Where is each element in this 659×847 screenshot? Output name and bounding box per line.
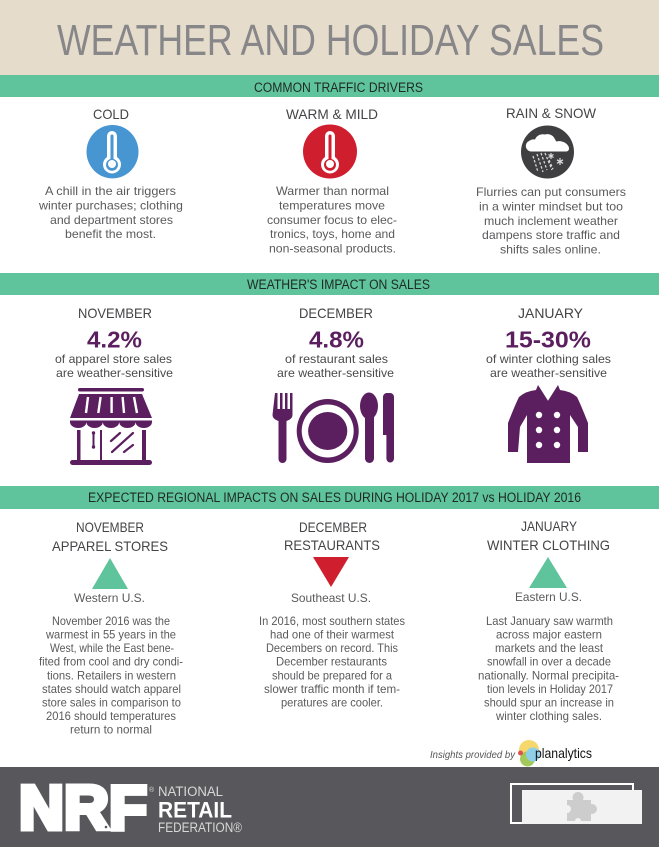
text: warm description: Warmer than normal bbox=[276, 184, 389, 198]
text: november explanation: return to normal bbox=[70, 723, 152, 737]
icon: storefront bbox=[70, 388, 152, 465]
panel: january winter clothing: JANUARY bbox=[521, 518, 578, 534]
text: december explanation bbox=[259, 614, 405, 709]
label: eastern US: Eastern U.S. bbox=[515, 590, 582, 604]
statistic: 4.8%: 4.8% bbox=[309, 326, 364, 352]
logo: NRF: ® bbox=[149, 786, 155, 794]
text: rain description: shifts sales online. bbox=[500, 243, 601, 257]
section band: weather impact: WEATHER'S IMPACT ON SALES bbox=[247, 277, 430, 292]
text: november explanation: states should watch apparel bbox=[42, 682, 181, 696]
text: january explanation: should spur an increase in bbox=[484, 695, 614, 709]
logo: NRF: NRF bbox=[19, 774, 147, 843]
placeholder with puzzle icon bbox=[522, 790, 642, 824]
text: apparel sensitivity: are weather-sensitive bbox=[56, 366, 173, 380]
panel: november apparel stores: APPAREL STORES bbox=[52, 538, 168, 554]
panel: december impact: DECEMBER bbox=[299, 305, 373, 321]
text: january explanation: Last January saw warmth bbox=[486, 614, 613, 628]
statistic: 15-30%: 15-30% bbox=[505, 326, 591, 352]
credit: insights provided by planalytics: planalytics bbox=[535, 745, 592, 761]
text: restaurant sensitivity: are weather-sensitive bbox=[277, 366, 394, 380]
panel: december restaurants bbox=[259, 519, 405, 709]
panel: january winter clothing: WINTER CLOTHING bbox=[487, 537, 610, 553]
text: december explanation: December restaurants bbox=[276, 655, 387, 669]
panel: december restaurants: RESTAURANTS bbox=[284, 537, 380, 553]
icon: red down triangle bbox=[313, 557, 349, 587]
text: restaurant sensitivity: of restaurant sales bbox=[285, 352, 388, 366]
credit: insights provided by planalytics: Insights provided by bbox=[430, 749, 516, 761]
text: december explanation: peratures are cooler. bbox=[281, 695, 383, 709]
icon: winter coat bbox=[508, 385, 588, 463]
text: winter clothing sensitivity: of winter clothing sales bbox=[486, 352, 611, 366]
text: november explanation: fited from cool and dry condi- bbox=[39, 655, 183, 669]
section band: regional impacts bbox=[0, 486, 659, 509]
logo: NRF bbox=[19, 774, 242, 843]
logo: NRF: FEDERATION® bbox=[158, 820, 242, 835]
panel: january winter clothing bbox=[478, 518, 619, 723]
text: warm description: non-seasonal products. bbox=[269, 242, 396, 256]
text: restaurant sensitivity bbox=[277, 352, 394, 380]
text: apparel sensitivity: of apparel store sales bbox=[55, 352, 172, 366]
text: january explanation: snowfall in over a decade bbox=[487, 655, 611, 669]
text: january explanation: across major eastern bbox=[496, 628, 602, 642]
section band: common traffic drivers bbox=[0, 75, 659, 97]
text: november explanation bbox=[39, 614, 183, 737]
icon: planalytics logo blobs bbox=[518, 740, 540, 766]
icon: red thermometer bbox=[303, 124, 357, 178]
footer bbox=[0, 767, 659, 847]
text: november explanation: tions. Retailers in western bbox=[47, 668, 176, 682]
icon: blue thermometer bbox=[86, 125, 138, 178]
text: rain description: much inclement weather bbox=[484, 214, 618, 228]
text: november explanation: West, while the East bene- bbox=[50, 641, 174, 655]
text: january explanation: nationally. Normal precipita- bbox=[478, 668, 619, 682]
panel: november apparel stores bbox=[39, 519, 183, 737]
text: warm description bbox=[267, 184, 397, 256]
text: rain description bbox=[476, 185, 626, 257]
panel: january impact bbox=[486, 305, 611, 463]
text: warm description: consumer focus to elec- bbox=[267, 213, 397, 227]
section band: regional impacts: EXPECTED REGIONAL IMPACTS ON SALES DURING HOLIDAY 2017 vs HOLIDAY 2016 bbox=[88, 490, 581, 505]
statistic: 4.2%: 4.2% bbox=[87, 326, 142, 352]
text: december explanation: In 2016, most southern states bbox=[259, 614, 405, 628]
panel: cold bbox=[38, 106, 183, 241]
panel: cold: COLD bbox=[93, 106, 129, 122]
label: southeast US: Southeast U.S. bbox=[291, 591, 371, 605]
text: cold description bbox=[38, 184, 183, 241]
text: cold description: and department stores bbox=[50, 213, 173, 227]
panel: warm and mild: WARM & MILD bbox=[286, 106, 378, 122]
text: cold description: winter purchases; clothing bbox=[38, 198, 183, 212]
text: warm description: temperatures move bbox=[279, 198, 385, 212]
icon: green up triangle bbox=[92, 558, 128, 589]
text: december explanation: had one of their warmest bbox=[270, 628, 395, 642]
panel: january impact: JANUARY bbox=[518, 305, 584, 321]
icon: green up triangle bbox=[529, 557, 567, 588]
icon: cloud with rain and snow bbox=[521, 126, 574, 178]
logo: NRF: RETAIL bbox=[158, 798, 232, 822]
panel: rain and snow bbox=[476, 105, 626, 257]
text: december explanation: Decembers on record. This bbox=[266, 641, 398, 655]
icon: plate and cutlery bbox=[272, 392, 394, 463]
text: november explanation: store sales in comparison to bbox=[42, 695, 181, 709]
text: apparel sensitivity bbox=[55, 352, 173, 380]
section band: weather impact bbox=[0, 273, 659, 295]
text: january explanation: winter clothing sales. bbox=[495, 709, 602, 723]
text: rain description: Flurries can put consumers bbox=[476, 185, 626, 199]
logo: NRF: NATIONAL bbox=[158, 784, 223, 799]
title banner bbox=[0, 0, 659, 75]
panel: december impact bbox=[272, 305, 394, 463]
section band: common traffic drivers: COMMON TRAFFIC DRIVERS bbox=[254, 80, 423, 95]
text: cold description: benefit the most. bbox=[65, 227, 156, 241]
text: november explanation: November 2016 was the bbox=[52, 614, 170, 628]
text: rain description: dampens store traffic and bbox=[482, 228, 620, 242]
text: december explanation: slower traffic month if tem- bbox=[264, 682, 400, 696]
text: rain description: in a winter mindset but too bbox=[479, 199, 623, 213]
panel: rain and snow: RAIN & SNOW bbox=[506, 105, 597, 121]
panel: december restaurants: DECEMBER bbox=[299, 519, 367, 535]
panel: warm and mild bbox=[267, 106, 397, 256]
text: december explanation: should be prepared for a bbox=[272, 668, 392, 682]
text: january explanation: markets and the least bbox=[495, 641, 604, 655]
text: january explanation bbox=[478, 614, 619, 723]
credit: insights provided by planalytics bbox=[430, 740, 592, 766]
text: winter clothing sensitivity bbox=[486, 352, 611, 380]
text: january explanation: tion levels in Holiday 2017 bbox=[487, 682, 613, 696]
text: november explanation: warmest in 55 years in the bbox=[45, 628, 176, 642]
panel: november impact: NOVEMBER bbox=[78, 305, 152, 321]
text: winter clothing sensitivity: are weather-sensitive bbox=[490, 366, 607, 380]
panel: november impact bbox=[55, 305, 173, 465]
label: western US: Western U.S. bbox=[74, 591, 145, 605]
text: november explanation: 2016 should temperatures bbox=[46, 709, 176, 723]
empty badge outline bbox=[511, 784, 633, 823]
text: cold description: A chill in the air triggers bbox=[45, 184, 176, 198]
text: warm description: tronics, toys, home and bbox=[270, 227, 395, 241]
panel: november apparel stores: NOVEMBER bbox=[76, 519, 144, 535]
